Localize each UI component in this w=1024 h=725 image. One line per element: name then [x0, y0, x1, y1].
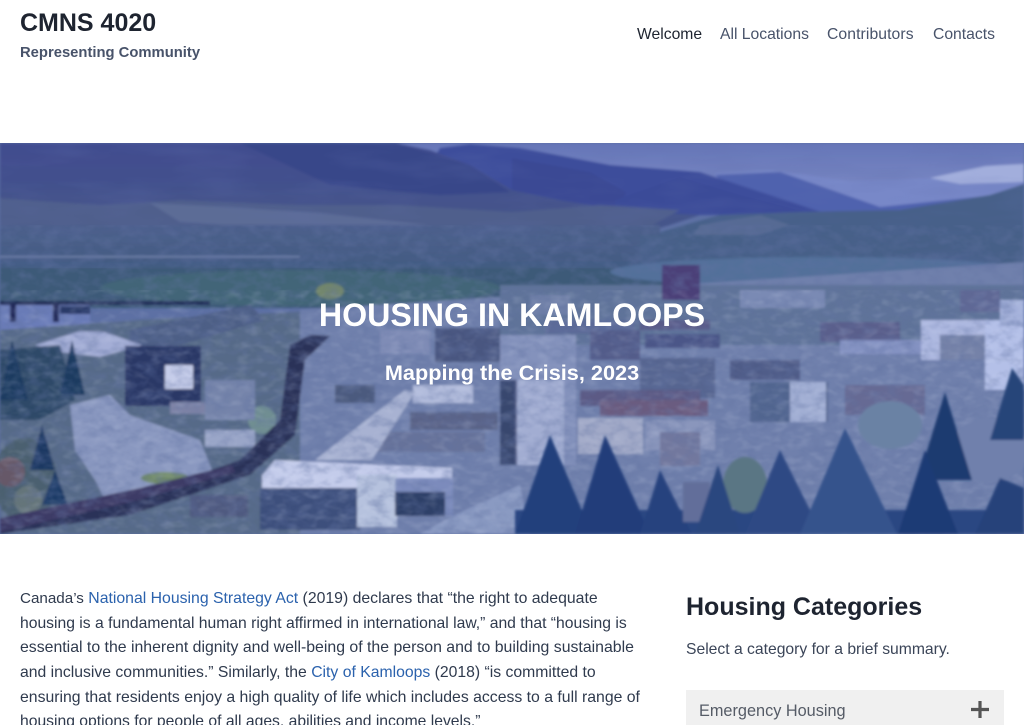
hero heading: HOUSING IN KAMLOOPS	[319, 297, 705, 333]
photo grain: city highlights	[0, 290, 1024, 534]
navigation menu: All Locations	[720, 26, 809, 43]
large left hillside	[0, 143, 700, 240]
site title: CMNS 4020	[20, 9, 156, 37]
downtown base	[300, 262, 1024, 534]
intro paragraph: Canada’s National Housing Strategy Act (2019) declares that “the right to adequate	[20, 590, 598, 607]
valley floor	[0, 225, 660, 275]
intro paragraph: essential to the inherent dignity and well-being of the person and to building sustainable	[20, 639, 634, 656]
navigation menu: Welcome	[637, 26, 702, 43]
site tagline: Representing Community	[20, 45, 200, 61]
sky and far mountains	[400, 143, 1024, 213]
navigation menu: Contributors	[827, 26, 914, 43]
navigation menu: Contacts	[933, 26, 995, 43]
central tower	[500, 335, 576, 465]
intro paragraph: housing is a fundamental human right affirmed in international law,” and that “housing is	[20, 615, 627, 632]
foreground trees	[515, 368, 1024, 534]
tree band	[0, 268, 1024, 308]
river and bridge	[0, 305, 90, 333]
icon: plus	[971, 701, 989, 718]
accordion item: emergency housing	[686, 690, 1004, 725]
parking lot	[420, 485, 530, 534]
photo grain: hills	[0, 143, 1024, 268]
red high rise	[662, 265, 700, 300]
intro paragraph: ensuring that residents enjoy a high quality of life which includes access to a full range of	[20, 689, 640, 706]
street	[315, 390, 415, 460]
navigation menu	[637, 26, 995, 43]
left autumn trees	[0, 438, 57, 522]
left district	[0, 310, 330, 534]
right hill	[650, 184, 1024, 250]
sidebar description: Select a category for a brief summary.	[686, 641, 950, 658]
belle building	[262, 460, 452, 490]
rail line	[0, 335, 330, 534]
intro paragraph	[20, 590, 640, 725]
accordion item: emergency housing: Emergency Housing	[699, 702, 846, 720]
sidebar heading: Housing Categories	[686, 593, 922, 621]
photo grain: city shadows	[0, 225, 1024, 534]
intro paragraph: and inclusive communities.” Similarly, the City of Kamloops (2018) “is committed to	[20, 664, 596, 681]
hero subheading: Mapping the Crisis, 2023	[385, 360, 639, 385]
buildings rows	[545, 320, 635, 334]
hero banner photo of Kamloops	[0, 143, 1024, 534]
